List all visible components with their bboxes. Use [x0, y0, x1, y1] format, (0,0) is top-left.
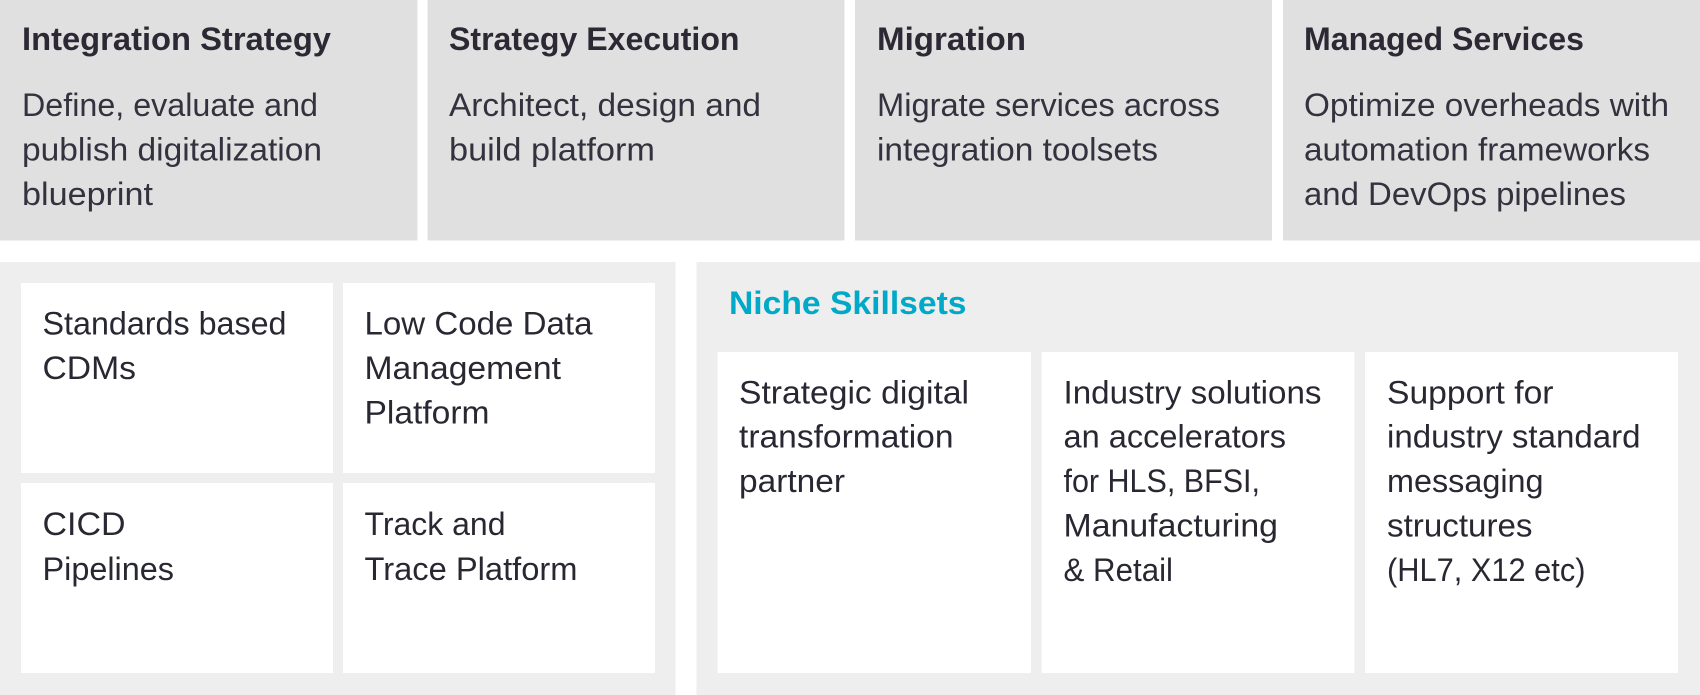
- card: Strategic digital transformation partner: transformation: [739, 418, 954, 454]
- panel: Migration: [855, 0, 1272, 240]
- text: Managed Services description: automation frameworks: [1304, 132, 1650, 168]
- card: Standards based CDMs: CDMs: [42, 350, 136, 386]
- card: Low Code Data Management Platform: [343, 283, 655, 473]
- panel: platform capabilities: [0, 262, 676, 695]
- card: Industry solutions and accelerators: Manufacturing: [1064, 508, 1278, 544]
- text: Managed Services description: and DevOps pipelines: [1304, 176, 1626, 212]
- card: Support for industry standard messaging structures: (HL7, X12 etc): [1387, 552, 1586, 588]
- card: Track and Trace Platform: Trace Platform: [364, 551, 578, 587]
- card: CICD Pipelines: [21, 483, 333, 673]
- text: Strategy Execution description: [449, 87, 761, 168]
- text: Integration Strategy description: publish digitalization: [22, 132, 322, 168]
- text: Managed Services description: [1304, 87, 1669, 212]
- panel: Niche Skillsets: [696, 262, 1700, 695]
- heading: Integration Strategy: Integration Strategy: [22, 21, 331, 57]
- card: Low Code Data Management Platform: Platform: [364, 394, 490, 430]
- text: Integration Strategy description: [22, 87, 322, 212]
- text: Strategy Execution description: build platform: [449, 132, 655, 168]
- text: Managed Services description: Optimize overheads with: [1304, 87, 1669, 123]
- card: Track and Trace Platform: Track and: [364, 506, 506, 542]
- card: Industry solutions and accelerators: & Retail: [1064, 552, 1173, 588]
- card: Industry solutions and accelerators: [1042, 352, 1354, 673]
- card: Strategic digital transformation partner: Strategic digital: [739, 374, 969, 410]
- heading: Migration: Migration: [877, 21, 1026, 57]
- card: CICD Pipelines: CICD: [42, 506, 125, 542]
- card: Support for industry standard messaging structures: structures: [1387, 508, 1532, 544]
- text: Migration description: integration toolsets: [877, 132, 1158, 168]
- heading: Strategy Execution: Strategy Execution: [449, 21, 740, 57]
- panel: Managed Services: [1283, 0, 1700, 240]
- text: Migration description: Migrate services across: [877, 87, 1220, 123]
- text: Integration Strategy description: Define, evaluate and: [22, 87, 318, 123]
- card: Industry solutions and accelerators: Industry solutions: [1064, 374, 1322, 410]
- heading: Managed Services: Managed Services: [1304, 21, 1584, 57]
- text: Integration Strategy description: blueprint: [22, 176, 153, 212]
- card: Standards based CDMs: Standards based: [42, 306, 286, 342]
- heading: Niche Skillsets: Niche Skillsets: [729, 285, 966, 321]
- panel: Integration Strategy: [0, 0, 418, 240]
- text: Strategy Execution description: Architect, design and: [449, 87, 761, 123]
- card: Industry solutions and accelerators: for HLS, BFSI,: [1064, 463, 1260, 499]
- card: Low Code Data Management Platform: Low Code Data: [364, 306, 593, 342]
- card: Strategic digital transformation partner: [718, 352, 1031, 673]
- card: Industry solutions and accelerators: an accelerators: [1064, 418, 1286, 454]
- text: Migration description: [877, 87, 1220, 168]
- card: Strategic digital transformation partner: partner: [739, 463, 845, 499]
- panel: Strategy Execution: [428, 0, 844, 240]
- card: Support for industry standard messaging structures: [1365, 352, 1678, 673]
- card: Support for industry standard messaging structures: messaging: [1387, 463, 1544, 499]
- card: Standards based CDMs: [21, 283, 333, 473]
- card: Low Code Data Management Platform: Management: [364, 350, 561, 386]
- card: Track and Trace Platform: [343, 483, 655, 673]
- card: Support for industry standard messaging structures: Support for: [1387, 374, 1554, 410]
- card: CICD Pipelines: Pipelines: [42, 551, 174, 587]
- card: Support for industry standard messaging structures: industry standard: [1387, 418, 1640, 454]
